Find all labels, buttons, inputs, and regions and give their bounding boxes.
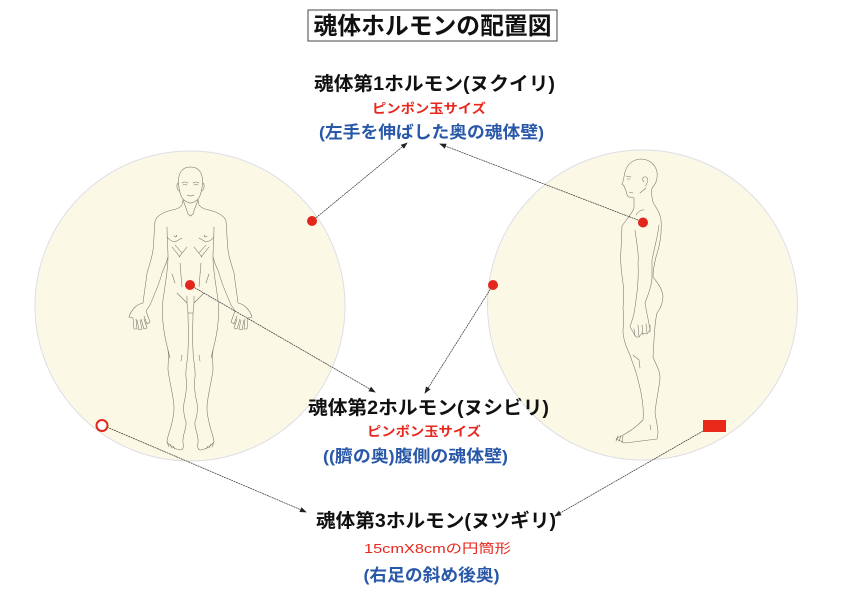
arrow: navel dot to hormone 2 <box>190 285 375 392</box>
marker: hormone 1 dot on front circle <box>307 216 317 226</box>
arrow: ring marker to hormone 3 <box>102 425 306 512</box>
marker: hormone 2 navel dot <box>185 280 195 290</box>
title: 魂体ホルモンの配置図 <box>314 13 552 40</box>
text block: hormone 1: 魂体第1ホルモン(ヌクイリ) <box>314 73 555 95</box>
arrow: right circle dot to hormone 2 <box>425 285 493 393</box>
text block: hormone 1 <box>314 73 555 142</box>
arrow: rectangle marker to hormone 3 <box>555 431 703 516</box>
marker: hormone 3 rectangle <box>703 420 726 432</box>
text block: hormone 1: ピンポン玉サイズ <box>372 101 486 116</box>
text block: hormone 2: ((臍の奥)腹側の魂体壁) <box>323 446 508 466</box>
text block: hormone 2: ピンポン玉サイズ <box>367 424 481 439</box>
marker: hormone 1 dot on side figure <box>638 218 648 228</box>
text block: hormone 1: (左手を伸ばした奥の魂体壁) <box>319 122 544 142</box>
text block: hormone 2: 魂体第2ホルモン(ヌシビリ) <box>308 397 549 419</box>
text block: hormone 3 <box>316 510 556 585</box>
panel: side body circle <box>488 150 798 460</box>
text block: hormone 3: 15cmX8cmの円筒形 <box>364 541 511 556</box>
front body figure <box>129 167 252 450</box>
text block: hormone 3: 魂体第3ホルモン(ヌツギリ) <box>316 510 556 532</box>
marker: hormone 2 dot on side circle <box>488 280 498 290</box>
text block: hormone 2 <box>308 397 549 466</box>
marker: hormone 3 ring <box>96 420 108 431</box>
side body figure <box>616 159 663 443</box>
text block: hormone 3: (右足の斜め後奥) <box>364 565 500 585</box>
panel: front body circle <box>35 151 345 461</box>
arrow: side dot to hormone 1 <box>440 144 643 222</box>
arrow: left circle dot to hormone 1 <box>312 143 407 221</box>
